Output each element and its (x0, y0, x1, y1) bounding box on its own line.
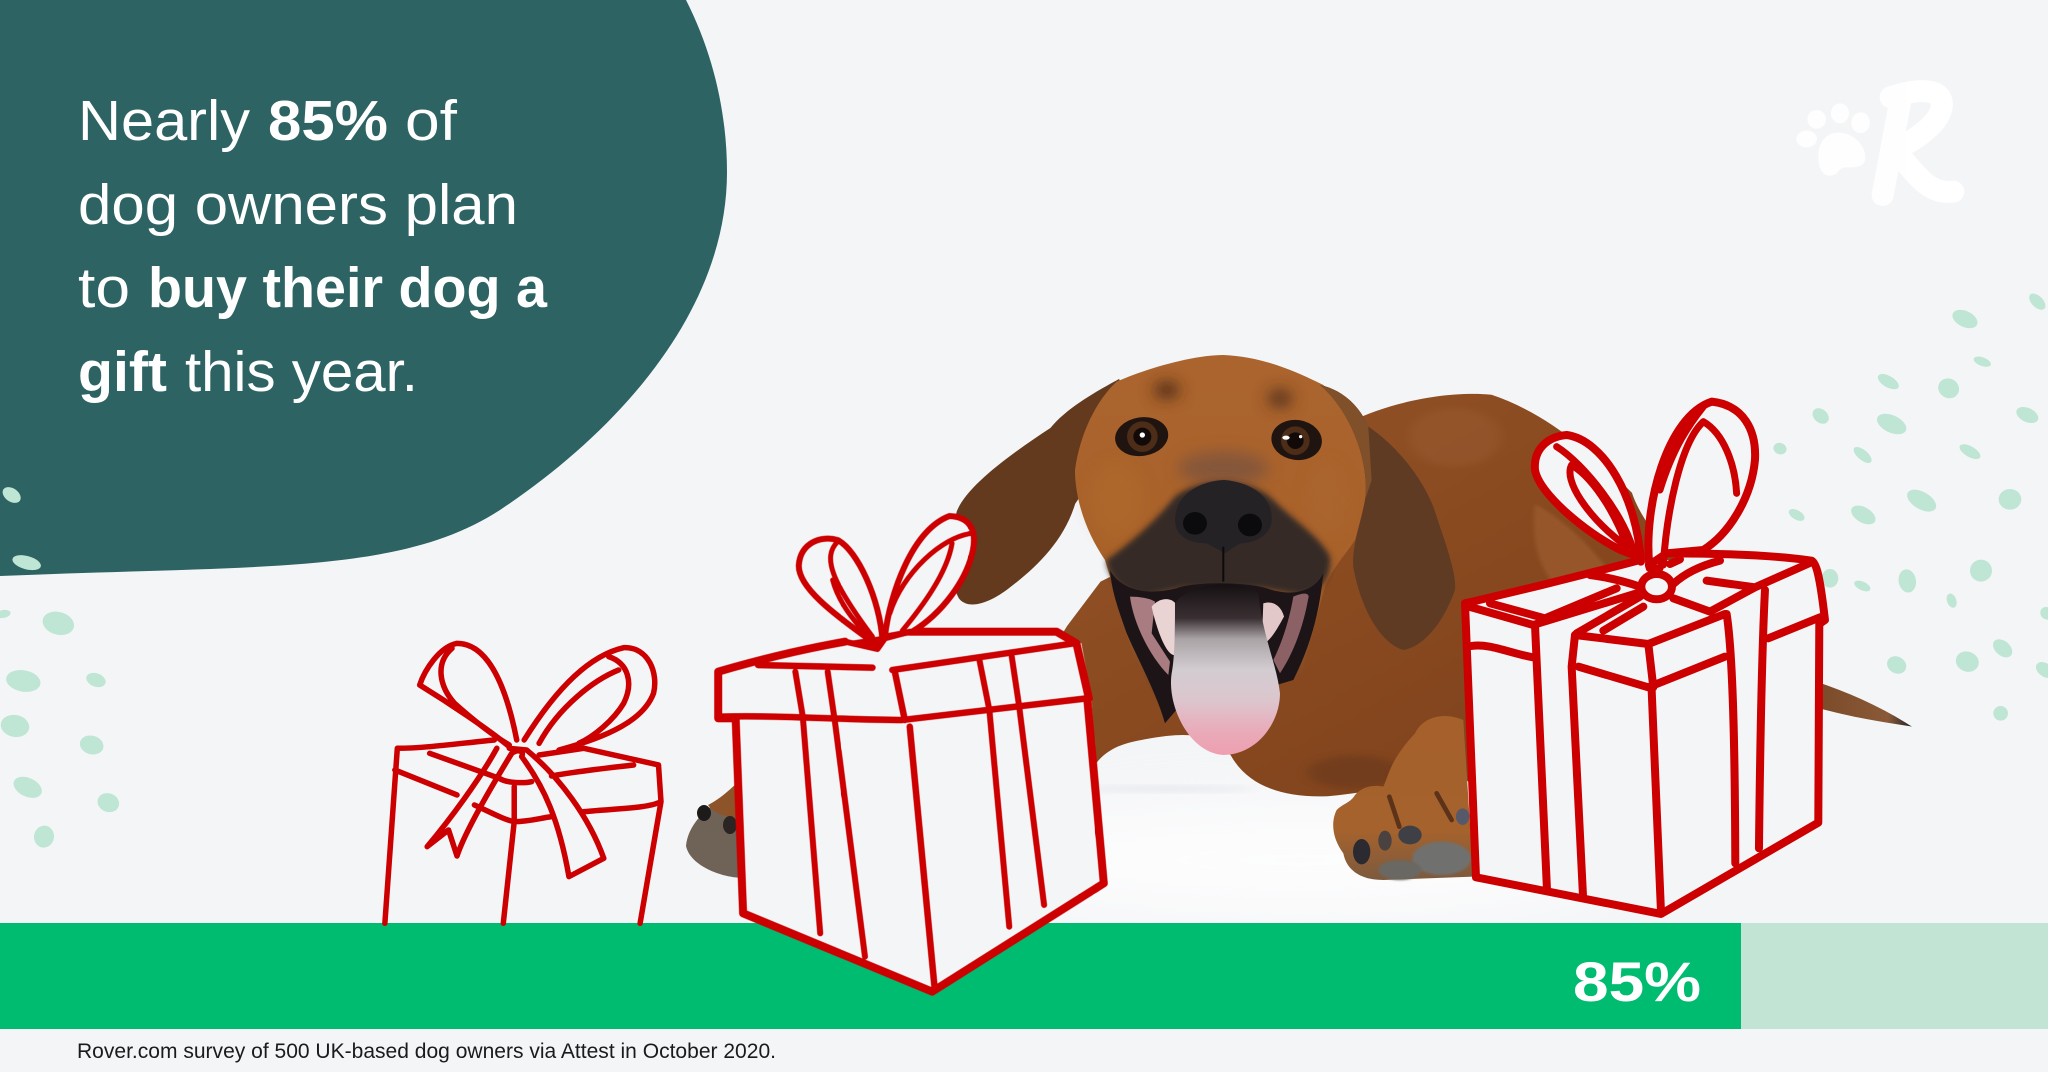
gift: left (385, 643, 661, 923)
dog: right ear fold (1320, 385, 1372, 500)
middle gift: bow inner lines (831, 533, 972, 637)
headline: buy their dog a (148, 256, 548, 320)
dog: head (1075, 355, 1455, 755)
dog: right cheek and teeth (1262, 602, 1284, 645)
paw: toe separators (1389, 793, 1452, 827)
gift: middle (718, 516, 1104, 992)
headline: to (78, 256, 130, 320)
confetti: right (1772, 291, 2048, 724)
right gift: box fill (1463, 560, 1825, 914)
left gift: box lines (385, 740, 661, 923)
dog illustration (686, 355, 1912, 880)
middle gift: outline (718, 632, 1104, 992)
dog: front-right leg and paw (1333, 716, 1473, 880)
right gift: left bow loop (1535, 435, 1641, 562)
paw: claws (1353, 808, 1469, 864)
dog: left ear (951, 379, 1127, 604)
right gift: knot (1641, 574, 1672, 599)
headline: 85% (268, 89, 388, 153)
dog: open mouth (1110, 570, 1323, 723)
middle gift: box fill (718, 632, 1104, 992)
middle gift: bow knot (845, 632, 910, 649)
confetti: left (0, 484, 122, 849)
headline (78, 89, 548, 404)
progress bar (0, 923, 2048, 1029)
icon: Rover paw and R logo (1796, 91, 1953, 195)
headline: Nearly (78, 89, 251, 153)
middle gift: left bow loop (799, 539, 882, 640)
bar: remaining track (1741, 923, 2048, 1029)
left gift: ribbon tails (427, 748, 604, 877)
right gift: bow inner lines (1557, 407, 1737, 565)
middle gift: right bow loop (885, 516, 974, 637)
left gift: bow (420, 643, 655, 750)
gift: right (1463, 402, 1825, 914)
middle gift: lid edges (718, 643, 1087, 988)
headline: gift (78, 340, 167, 404)
right gift: ribbons (1535, 590, 1765, 912)
dog: body and left ear (951, 379, 1912, 811)
dog: right gum (1273, 594, 1309, 673)
headline: of (405, 89, 457, 153)
head: shading (1090, 382, 1347, 537)
dog: tail (1816, 682, 1912, 727)
head shape (1075, 355, 1372, 707)
right gift: center strap (1648, 560, 1663, 568)
dog: nose (1175, 480, 1272, 582)
dog: left cheek and teeth (1152, 599, 1177, 655)
headline: this year. (185, 340, 418, 404)
dog: right ear (1320, 385, 1455, 650)
dog: tongue (1171, 584, 1280, 755)
headline: dog owners plan (78, 173, 518, 237)
dog: left eye (1113, 414, 1171, 460)
dog: right eye (1269, 417, 1325, 463)
floor glow (980, 800, 1620, 920)
dog: front-left paw (686, 775, 745, 878)
bar: filled 85% (0, 923, 1741, 1029)
right gift: right bow loop (1648, 402, 1755, 565)
dog: under-belly shadow (1308, 756, 1401, 789)
right gift: lid edges (1467, 559, 1820, 687)
source footnote: Rover.com survey of 500 UK-based dog owners via Attest in October 2020. (77, 1040, 776, 1063)
dog: floor shadow (1080, 786, 1254, 792)
middle gift: ribbons (795, 657, 1044, 957)
bar value label: 85% (1573, 950, 1701, 1013)
dog: left gum (1130, 597, 1170, 675)
right gift: outline (1465, 553, 1825, 914)
dog: torso (953, 394, 1702, 811)
paw: lower pad (1378, 860, 1422, 880)
dog: back highlight (1408, 408, 1502, 467)
dog: dark muzzle (1107, 482, 1330, 597)
dog: haunch fold (1534, 504, 1609, 582)
paw: pads (1412, 842, 1471, 875)
teal blob panel (0, 0, 727, 576)
